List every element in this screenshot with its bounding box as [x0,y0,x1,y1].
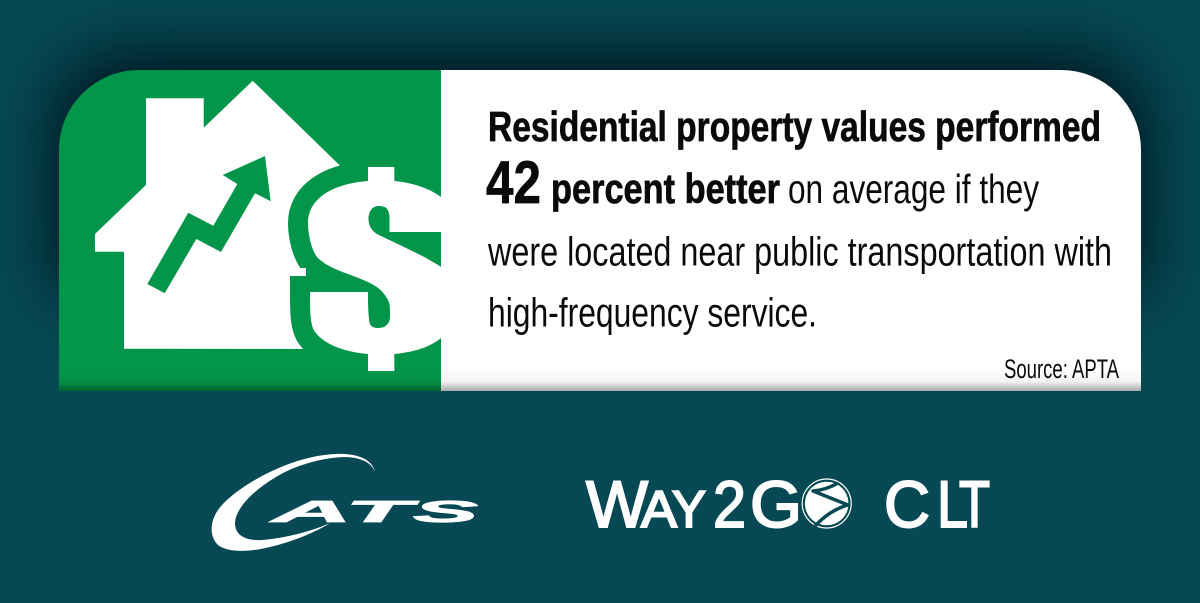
logo letters: S [413,494,479,529]
number 42: 42 [486,149,541,216]
text line 2 [486,149,1039,216]
logo CLT: C [884,467,930,541]
panel: white text area [441,70,1141,391]
source: Source: APTA [1004,354,1119,384]
logo letters [268,494,479,529]
logo CLT: L [937,467,968,541]
logo swoosh [212,454,375,551]
logo letters: T [345,494,422,529]
panel: statistic card [59,70,1141,391]
on average if they: on average if they [788,166,1039,212]
logo CLT: T [959,467,990,541]
icon: circle with chevron [802,479,851,528]
logo wordmark: Y [672,481,706,539]
panel shadow [55,55,1145,290]
logo wordmark: A [641,481,677,539]
logo wordmark [586,467,802,541]
logo wordmark: W [586,467,649,541]
logo CLT [884,467,990,541]
logo wordmark: 2 [713,467,746,541]
logo: CATS [212,454,479,551]
icon: dollar sign outline [288,166,344,349]
logo wordmark: G [750,467,802,541]
icon: outline trim [290,268,306,276]
logo letters: A [268,494,352,529]
icon: house [95,81,345,349]
bottom shading [59,377,1141,391]
panel: green icon area [59,70,441,391]
icon: house with rising arrow and dollar sign [95,81,441,371]
percent better: percent better [551,165,780,212]
icon: rising arrow [147,156,271,293]
logo: Way2Go CLT [586,467,990,541]
text line 4: high-frequency service. [488,290,817,336]
icon: dollar sign [308,167,441,371]
text block: statistic [486,103,1119,384]
